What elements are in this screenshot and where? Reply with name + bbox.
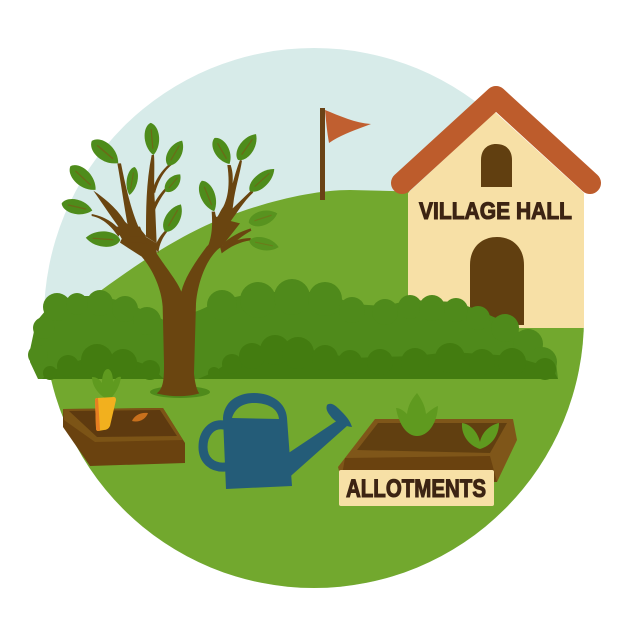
can handle side [203, 425, 225, 467]
tree [60, 122, 280, 398]
watering can [203, 393, 352, 489]
door [470, 237, 524, 325]
scene background circle [30, 40, 600, 600]
allotments label: ALLOTMENTS [346, 475, 486, 503]
ground [51, 328, 584, 588]
hedge back layer [28, 279, 558, 379]
left raised bed with carrot [63, 369, 185, 466]
right raised bed with plants [338, 393, 517, 506]
carrot leaves [92, 369, 121, 398]
roof [402, 97, 590, 183]
spout rose [326, 404, 352, 427]
allotments label [339, 470, 494, 506]
carrot slice [132, 413, 148, 422]
can top handle and body [223, 393, 292, 489]
tree shadow [150, 386, 210, 398]
village hall building [402, 97, 590, 328]
seedling small [462, 423, 499, 449]
leaves [60, 122, 280, 253]
trunk and branches [92, 155, 253, 396]
village hall label: VILLAGE HALL [419, 198, 572, 225]
flag [320, 108, 371, 200]
hill [101, 190, 410, 320]
seedling large [396, 393, 438, 436]
window [481, 144, 512, 187]
carrot [95, 397, 116, 431]
spout [284, 420, 347, 482]
hedge front layer [42, 335, 558, 380]
